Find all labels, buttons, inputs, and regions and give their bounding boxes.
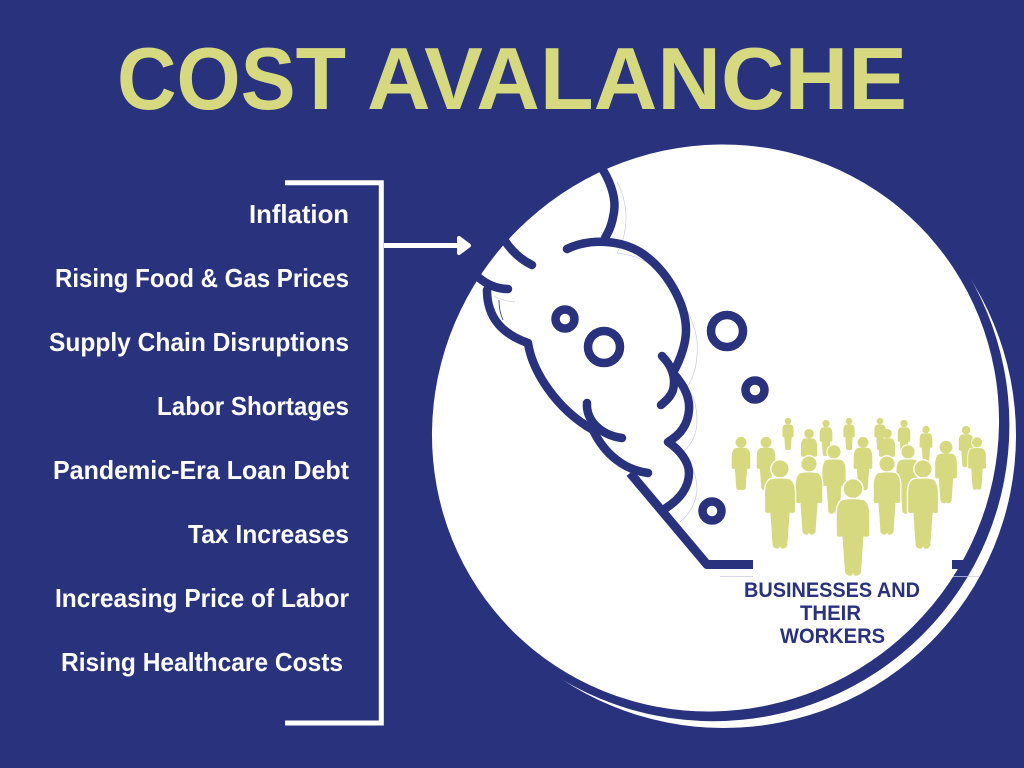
factor: food and gas: Rising Food & Gas Prices	[55, 263, 349, 293]
factor: labor shortages: Labor Shortages	[157, 391, 349, 421]
arrow	[384, 238, 469, 253]
caption: businesses and their workers	[744, 579, 920, 648]
snow rings	[556, 310, 574, 328]
caption: businesses and their workers: WORKERS	[780, 625, 885, 648]
crowd of workers	[732, 418, 986, 576]
title: COST	[117, 29, 346, 128]
slope	[630, 473, 753, 564]
factor: inflation: Inflation	[249, 199, 349, 229]
factor: loan debt: Pandemic-Era Loan Debt	[53, 455, 349, 485]
factor: supply chain: Supply Chain Disruptions	[49, 327, 349, 357]
circle with crescent	[417, 129, 1016, 728]
title: AVALANCHE	[367, 29, 907, 128]
caption: businesses and their workers: BUSINESSES AND	[744, 579, 920, 602]
factor: labor price: Increasing Price of Labor	[55, 583, 349, 613]
list of cost factors	[49, 199, 349, 677]
bracket	[285, 183, 381, 723]
caption: businesses and their workers: THEIR	[800, 602, 861, 625]
avalanche illustration	[478, 170, 968, 564]
faint offset lines	[494, 182, 979, 576]
cloud lobes	[603, 170, 615, 238]
title	[117, 29, 907, 128]
factor: healthcare: Rising Healthcare Costs	[61, 647, 343, 677]
factor: tax: Tax Increases	[188, 519, 349, 549]
